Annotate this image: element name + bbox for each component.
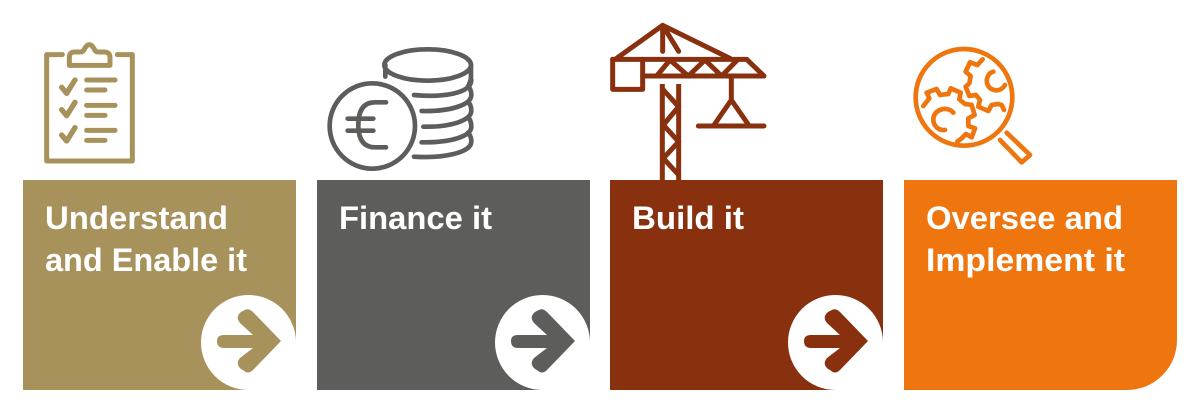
panel: Understand and Enable it <box>23 180 296 390</box>
icon: arrow button <box>495 295 590 390</box>
heading: Oversee and Implement it <box>926 200 1125 278</box>
icon: arrow button <box>201 295 296 390</box>
panel: Finance it <box>317 180 590 390</box>
heading: Build it: Build it <box>632 200 744 236</box>
icon: magnifying glass with gears <box>916 49 1030 162</box>
heading: Finance it: Finance it <box>339 200 492 236</box>
heading: Oversee and Implement it: Oversee and <box>926 200 1123 236</box>
icon: arrow button <box>788 295 883 390</box>
icon: euro coins <box>330 49 471 169</box>
panel: Build it <box>610 180 883 390</box>
heading: Understand and Enable it: and Enable it <box>45 242 247 278</box>
icon: construction crane <box>613 25 764 182</box>
heading: Understand and Enable it: Understand <box>45 200 228 236</box>
icon: clipboard checklist <box>47 45 132 161</box>
heading: Understand and Enable it <box>45 200 247 278</box>
panel: Oversee and Implement it <box>904 180 1177 390</box>
heading: Oversee and Implement it: Implement it <box>926 242 1125 278</box>
